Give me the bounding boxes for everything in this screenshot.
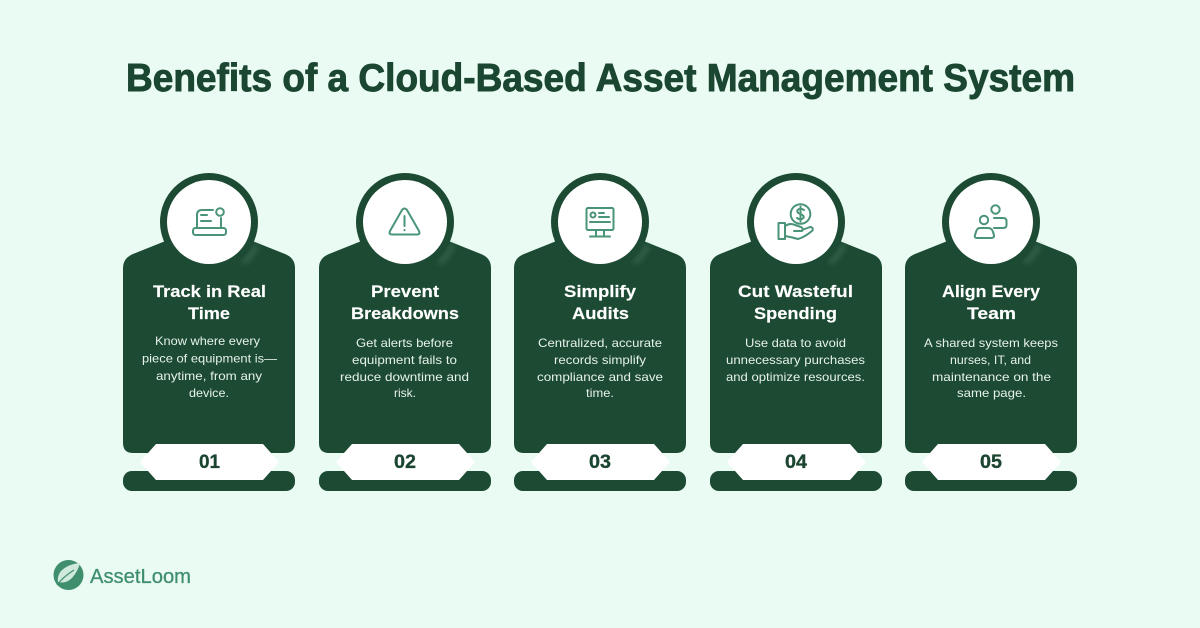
heading	[351, 282, 459, 323]
description: reduce downtime and	[340, 370, 469, 384]
number badge	[727, 444, 866, 480]
description	[924, 336, 1058, 400]
heading	[564, 282, 637, 323]
panel: cut wasteful spending	[710, 173, 882, 491]
footer bar	[123, 471, 295, 491]
heading: Breakdowns	[351, 304, 459, 323]
icon: hand holding coin	[778, 204, 813, 239]
footer bar	[905, 471, 1077, 491]
description: nurses, IT, and	[950, 353, 1031, 367]
description	[142, 334, 277, 400]
brand name: AssetLoom	[90, 565, 191, 588]
footer bar	[710, 471, 882, 491]
description	[726, 336, 865, 384]
description: compliance and save	[537, 370, 663, 384]
icon circle	[551, 173, 649, 271]
description: device.	[189, 386, 229, 400]
heading: Team	[967, 304, 1016, 323]
panel: track in real time	[123, 173, 295, 491]
description: risk.	[394, 386, 416, 400]
description: A shared system keeps	[924, 336, 1058, 350]
icon circle	[942, 173, 1040, 271]
description	[537, 336, 663, 400]
description: Use data to avoid	[745, 336, 846, 350]
description: Get alerts before	[356, 336, 453, 350]
number badge	[140, 444, 279, 480]
description: equipment fails to	[352, 353, 457, 367]
icon: warning triangle	[390, 208, 419, 234]
number badge	[336, 444, 475, 480]
number badge: 04	[785, 452, 807, 473]
heading: Prevent	[371, 282, 439, 301]
description: and optimize resources.	[726, 370, 865, 384]
description: Centralized, accurate	[538, 336, 662, 350]
icon: two people	[975, 205, 1006, 238]
heading: Time	[188, 304, 230, 323]
icon circle	[747, 173, 845, 271]
description: same page.	[957, 386, 1026, 400]
heading: Track in Real	[153, 282, 266, 301]
heading	[942, 282, 1041, 323]
number badge: 01	[199, 452, 220, 473]
footer bar	[514, 471, 686, 491]
panel: align every team	[905, 173, 1077, 491]
number badge	[922, 444, 1061, 480]
number badge: 03	[589, 452, 611, 473]
card body	[319, 238, 491, 453]
panel: prevent breakdowns	[319, 173, 491, 491]
heading: Align Every	[942, 282, 1041, 301]
heading: Audits	[572, 304, 629, 323]
card body	[514, 238, 686, 453]
card body	[710, 238, 882, 453]
icon: leaf badge	[54, 560, 84, 590]
card body	[123, 238, 295, 453]
title: Benefits of a Cloud-Based Asset Management System	[126, 57, 1075, 100]
heading: Simplify	[564, 282, 637, 301]
description: Know where every	[155, 334, 260, 348]
description	[340, 336, 469, 400]
footer bar	[319, 471, 491, 491]
icon circle	[160, 173, 258, 271]
panel: simplify audits	[514, 173, 686, 491]
icon circle	[356, 173, 454, 271]
heading: Cut Wasteful	[738, 282, 853, 301]
description: records simplify	[554, 353, 646, 367]
icon: monitor with record	[586, 208, 614, 236]
description: unnecessary purchases	[726, 353, 865, 367]
description: anytime, from any	[156, 369, 262, 383]
number badge: 02	[394, 452, 416, 473]
heading	[738, 282, 853, 323]
heading: Spending	[754, 304, 837, 323]
description: time.	[586, 386, 614, 400]
number badge: 05	[980, 452, 1002, 473]
number badge	[531, 444, 670, 480]
logo	[54, 560, 191, 590]
icon: laptop with status dot	[193, 208, 226, 235]
heading	[153, 282, 266, 323]
description: piece of equipment is—	[142, 352, 277, 366]
description: maintenance on the	[932, 370, 1051, 384]
card body	[905, 238, 1077, 453]
